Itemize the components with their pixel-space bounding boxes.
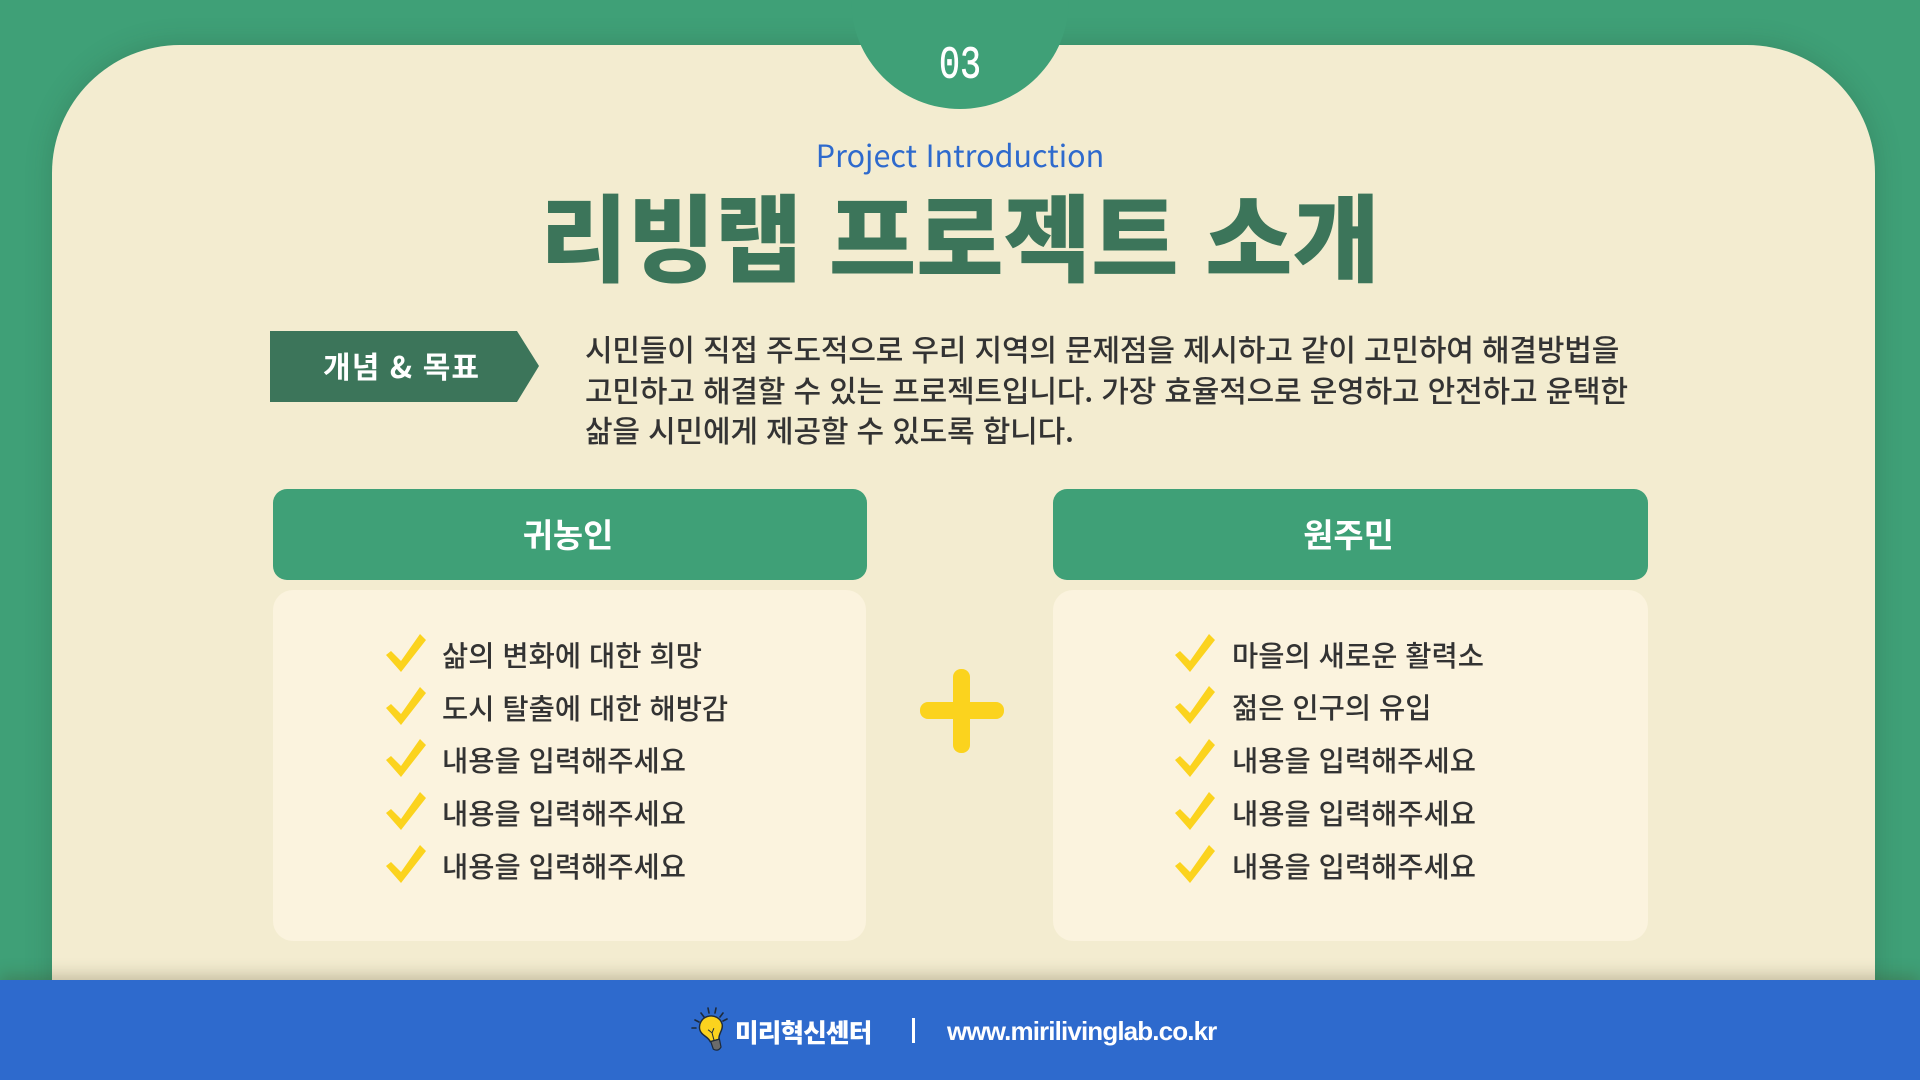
- description paragraph: 삶을 시민에게 제공할 수 있도록 합니다.: [585, 407, 1074, 451]
- item 2: 도시 탈출에 대한 해방감: [442, 687, 728, 728]
- item 5: 내용을 입력해주세요: [1232, 845, 1476, 886]
- number badge: [851, 0, 1069, 109]
- description paragraph: [585, 326, 1628, 451]
- footer: [0, 980, 1920, 1080]
- panel: residents list: [1053, 590, 1648, 941]
- title: 리빙랩 프로젝트 소개: [540, 165, 1380, 302]
- subtitle: Project Introduction: [816, 132, 1104, 176]
- panel: returning farmers list: [273, 590, 866, 941]
- header: returning farmers: [273, 489, 867, 580]
- item 2: 젊은 인구의 유입: [1232, 686, 1432, 727]
- description paragraph: 고민하고 해결할 수 있는 프로젝트입니다. 가장 효율적으로 운영하고 안전하고 윤택한: [585, 367, 1628, 411]
- item 3: 내용을 입력해주세요: [1232, 739, 1476, 780]
- item 1: 마을의 새로운 활력소: [1232, 634, 1484, 675]
- header: returning farmers: 귀농인: [523, 510, 613, 557]
- header: residents: 원주민: [1303, 510, 1394, 557]
- description paragraph: 시민들이 직접 주도적으로 우리 지역의 문제점을 제시하고 같이 고민하여 해결방법을: [585, 326, 1619, 370]
- organization name: 미리혁신센터: [735, 1013, 871, 1050]
- page number: 03: [939, 40, 981, 92]
- item 5: 내용을 입력해주세요: [442, 845, 686, 886]
- icon: plus: [920, 669, 1004, 753]
- separator: [912, 1018, 915, 1043]
- item 3: 내용을 입력해주세요: [442, 739, 686, 780]
- website: www.mirilivinglab.co.kr: [947, 1016, 1216, 1046]
- header: residents: [1053, 489, 1648, 580]
- item 4: 내용을 입력해주세요: [1232, 792, 1476, 833]
- icon: light bulb: [691, 1007, 728, 1051]
- item 4: 내용을 입력해주세요: [442, 792, 686, 833]
- badge: concept and goal: [270, 331, 539, 402]
- badge: concept and goal: 개념 & 목표: [323, 343, 480, 387]
- item 1: 삶의 변화에 대한 희망: [442, 634, 702, 675]
